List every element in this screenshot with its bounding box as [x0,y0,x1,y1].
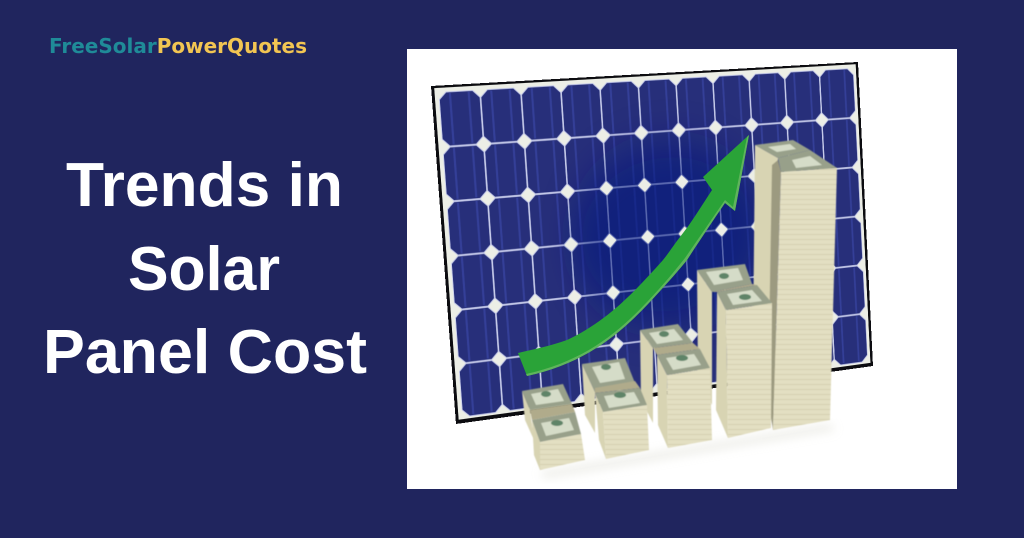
title: Panel Cost [43,318,367,387]
money stack 2 [582,358,649,459]
money stack 4 [697,264,772,438]
money stack 5 [753,140,837,430]
title [43,151,367,387]
money stack 1 [522,384,585,470]
ground shadow [540,424,835,478]
solar panel [431,62,873,424]
title: Trends in [66,151,343,220]
title: Solar [128,235,280,304]
brand logo: FreeSolarPowerQuotes [49,34,307,58]
green rising arrow [518,135,749,376]
money stack 3 [640,324,712,448]
photo background panel [407,49,957,489]
